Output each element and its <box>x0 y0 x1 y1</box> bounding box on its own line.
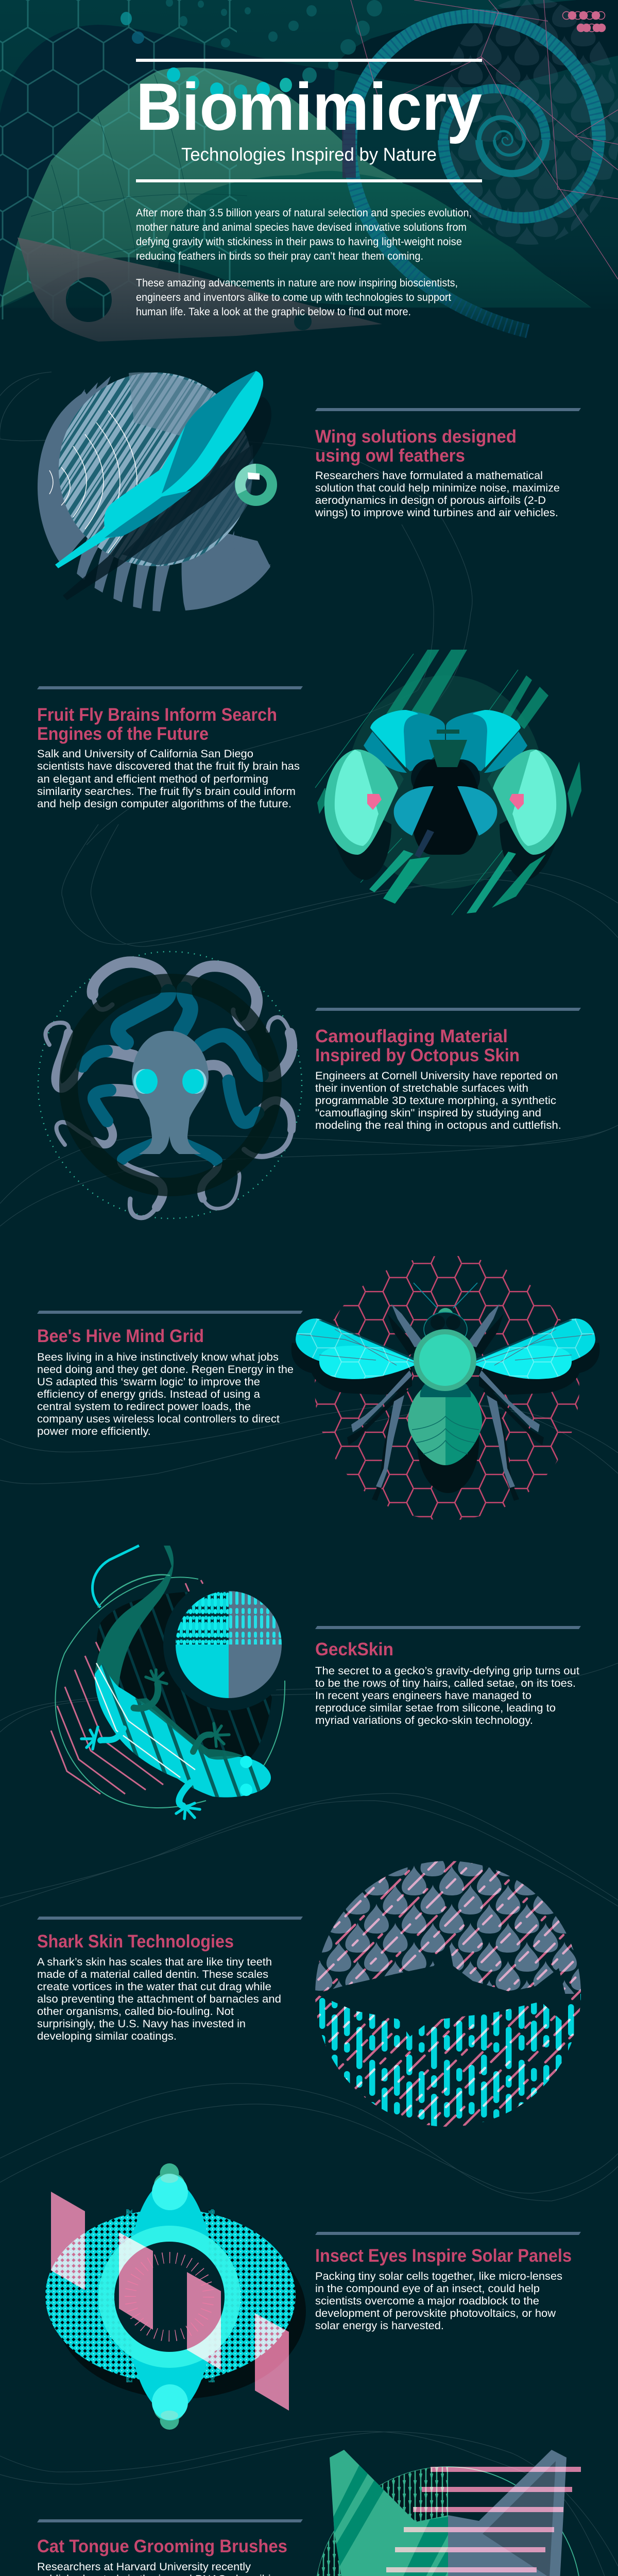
illustration: insect eye <box>45 2163 306 2430</box>
section: insect eyes <box>315 2232 581 2332</box>
illustration: gecko <box>51 1546 294 1819</box>
body text: surprisingly, the U.S. Navy has invested in <box>37 2018 246 2030</box>
body text: need doing and they get done. Regen Energy in the <box>37 1364 294 1376</box>
bee left half <box>291 1304 426 1501</box>
body text: an elegant and efficient method of performing <box>37 773 268 785</box>
head and body <box>132 1031 209 1154</box>
icon: pink circle dots top right <box>562 11 606 32</box>
body text: A shark’s skin has scales that are like tiny teeth <box>37 1956 272 1968</box>
body text <box>37 1351 294 1437</box>
body text <box>315 1070 561 1131</box>
abdomen <box>408 1380 482 1465</box>
body text: wings) to improve wind turbines and air vehicles. <box>315 507 558 519</box>
body text: modeling the real thing in octopus and cuttlefish. <box>315 1120 561 1131</box>
illustration: octopus <box>38 952 302 1218</box>
abdomen shadow <box>417 1392 479 1493</box>
ear inner <box>483 2461 556 2576</box>
illustration: shark skin <box>314 1860 582 2128</box>
rule <box>37 1917 303 1920</box>
ring <box>106 2234 233 2360</box>
rule <box>315 1008 581 1011</box>
dark ring <box>68 983 272 1187</box>
title block <box>136 59 482 182</box>
left arrow pattern <box>315 2467 448 2576</box>
body text: solution that could help minimize noise, maximize <box>315 482 560 494</box>
left eye <box>133 1069 158 1094</box>
dotted circle <box>38 952 302 1218</box>
body text: made of a material called dentin. These scales <box>37 1969 268 1980</box>
rule <box>37 1311 303 1314</box>
body text: Packing tiny solar cells together, like micro-lenses <box>315 2270 562 2282</box>
pink dashes <box>314 1860 582 2128</box>
thin lines <box>315 654 520 915</box>
body text: development of perovskite photovoltaics, or how <box>315 2308 556 2319</box>
body text <box>315 2270 562 2332</box>
heading: Wing solutions designed <box>315 427 517 447</box>
heading: Cat Tongue Grooming Brushes <box>37 2536 287 2556</box>
green ring <box>240 469 272 501</box>
body text: create vortices in the water that cut drag while <box>37 1981 271 1993</box>
left cyan paw <box>81 1727 124 1749</box>
intro text: These amazing advancements in nature are now inspiring bioscientists, <box>136 277 458 289</box>
back strip in green <box>135 1698 243 1759</box>
half: left (mirrored) <box>324 710 448 880</box>
scales <box>314 1860 582 1994</box>
illustration: fruit fly brain <box>315 650 581 915</box>
body text: company uses wireless local controllers to direct <box>37 1413 280 1425</box>
body text: reproduce similar setae from silicone, leading to <box>315 1702 556 1714</box>
body text: efficiency of energy grids. Instead of using a <box>37 1388 260 1400</box>
top stripes <box>317 650 581 818</box>
face left stripes <box>330 2463 448 2576</box>
thin circle <box>315 2467 581 2576</box>
shadow <box>56 2224 306 2399</box>
body text: myriad variations of gecko-skin technology. <box>315 1715 533 1726</box>
patterned disk <box>176 1591 282 1698</box>
section: geckskin <box>315 1626 581 1726</box>
lower shaded area <box>122 445 253 565</box>
owl wing fringe <box>68 376 271 572</box>
lower teal lobes <box>394 786 497 836</box>
vertical cyan lens <box>126 2180 215 2413</box>
pink lines <box>51 1580 203 1794</box>
side dotted overlap <box>126 2209 215 2382</box>
tongue bars <box>315 2467 581 2576</box>
title block: Biomimicry <box>136 69 482 144</box>
lower stripes <box>369 829 546 913</box>
rule <box>315 2232 581 2235</box>
intro text: After more than 3.5 billion years of natural selection and species evolution, <box>136 207 472 219</box>
body text <box>37 1956 281 2042</box>
face left <box>330 2450 448 2576</box>
radial ticks <box>130 2258 209 2336</box>
body text: aerodynamics in design of porous airfoils (2-D <box>315 495 546 506</box>
body text: developing similar coatings. <box>37 2030 177 2042</box>
disc stripes <box>59 372 252 566</box>
dotted eye disc <box>45 2209 296 2382</box>
shark silhouette <box>315 1944 565 2037</box>
body text: Salk and University of California San Diego <box>37 748 253 760</box>
section: octopus <box>315 1008 581 1131</box>
title block: Technologies Inspired by Nature <box>181 144 437 165</box>
body text: programmable 3D texture morphing, a synthetic <box>315 1095 556 1107</box>
body text: US adapted this ‘swarm logic’ to improve the <box>37 1376 260 1388</box>
tentacles <box>45 962 292 1218</box>
body text: The secret to a gecko’s gravity-defying grip turns out <box>315 1665 579 1677</box>
illustration: owl feather <box>38 371 272 616</box>
body text: other organisms, called bio-fouling. Not <box>37 2006 234 2018</box>
thin green circle <box>55 1577 206 1808</box>
heading: GeckSkin <box>315 1639 393 1659</box>
gecko stripes <box>101 1663 261 1797</box>
illustration: cat <box>317 2450 581 2576</box>
section: bee <box>37 1311 303 1437</box>
heading: Bee's Hive Mind Grid <box>37 1326 204 1346</box>
honeycomb <box>315 1256 579 1520</box>
feather <box>55 371 263 568</box>
halo <box>348 675 543 889</box>
gap ring around disk <box>163 1579 294 1710</box>
face right <box>448 2450 566 2576</box>
intro text <box>136 207 472 318</box>
heading: Fruit Fly Brains Inform Search <box>37 705 277 725</box>
intro text: mother nature and animal species have devised innovative solutions from <box>136 222 467 233</box>
inner lighter disc <box>59 372 252 566</box>
body text: scientists have discovered that the fruit fly brain has <box>37 760 300 772</box>
body text: in the compound eye of an insect, could help <box>315 2283 540 2295</box>
intro text: reducing feathers in birds so their pray can’t hear them coming. <box>136 250 423 262</box>
tail <box>95 1546 174 1687</box>
body text: also preventing the attachment of barnacles and <box>37 1993 281 2005</box>
owl wing outer <box>38 392 270 612</box>
body text: Researchers at Harvard University recently <box>37 2561 251 2573</box>
body text: Engineers at Cornell University have reported on <box>315 1070 558 1082</box>
abdomen band <box>420 1384 471 1397</box>
cyan bars <box>314 1994 582 2128</box>
disc upper tone <box>129 372 242 443</box>
body text <box>315 470 560 519</box>
body text: scientists overcome a major roadblock to the <box>315 2295 539 2307</box>
cap overlap <box>161 2174 178 2420</box>
head <box>424 1308 467 1346</box>
right eye <box>182 1069 207 1094</box>
heading: Shark Skin Technologies <box>37 1931 234 1952</box>
upper dark paw <box>134 1670 167 1708</box>
section: cat <box>37 2519 303 2576</box>
bee right half <box>465 1304 599 1501</box>
pupil <box>114 2242 225 2352</box>
heading line two: using owl feathers <box>315 446 465 466</box>
intro text: engineers and inventors alike to come up with technologies to support <box>136 292 451 303</box>
body text: In recent years engineers have managed to <box>315 1690 531 1702</box>
body text: "camouflaging skin" inspired by studying and <box>315 1107 541 1119</box>
body text: to be the rows of tiny hairs, called setae, on its toes. <box>315 1677 576 1689</box>
body text: power more efficiently. <box>37 1426 151 1437</box>
body text: solar energy is harvested. <box>315 2320 444 2332</box>
intro text: human life. Take a look at the graphic below to find out more. <box>136 306 411 318</box>
body text: Bees living in a hive instinctively know what jobs <box>37 1351 279 1363</box>
rule <box>315 1626 581 1629</box>
feather shadow <box>63 397 271 600</box>
intro text: defying gravity with stickiness in their paws to having light-weight noise <box>136 236 462 248</box>
tail tip <box>93 1546 139 1607</box>
body text: central system to redirect power loads, the <box>37 1401 251 1413</box>
body text <box>315 1665 579 1726</box>
body text <box>37 2561 301 2576</box>
rule <box>315 408 581 411</box>
body text: and help design computer algorithms of the future. <box>37 798 291 810</box>
section: shark <box>37 1917 303 2042</box>
bottom cyan paw <box>176 1783 200 1819</box>
heading line two: Inspired by Octopus Skin <box>315 1045 520 1065</box>
gecko body <box>95 1663 271 1798</box>
thorax <box>414 1329 476 1391</box>
section: wing solutions <box>315 408 581 519</box>
half: right <box>443 710 566 880</box>
body text: Researchers have formulated a mathematical <box>315 470 543 482</box>
feather notches <box>62 524 185 616</box>
parallelograms <box>51 2192 289 2411</box>
heading: Insect Eyes Inspire Solar Panels <box>315 2246 572 2266</box>
body text <box>37 748 300 810</box>
rule <box>37 686 303 689</box>
honeycomb through wings <box>297 1318 594 1379</box>
centre column <box>411 757 480 855</box>
antennae <box>414 1283 477 1308</box>
lens highlights <box>152 2174 188 2420</box>
heading: Camouflaging Material <box>315 1026 508 1046</box>
upper centre marks <box>429 730 467 767</box>
rule <box>37 2519 303 2522</box>
body text: their invention of stretchable surfaces with <box>315 1082 528 1094</box>
paws <box>81 1670 229 1819</box>
green end caps <box>154 2163 185 2430</box>
illustration: bee <box>291 1256 599 1520</box>
white lines <box>95 1663 195 1777</box>
feather dark vane <box>162 371 256 494</box>
dark blob <box>97 1592 272 1758</box>
section: fruit fly <box>37 686 303 810</box>
right thin arc <box>255 1681 285 1777</box>
right dark paw <box>193 1723 229 1752</box>
eye bumps <box>240 1756 252 1796</box>
body text: similarity searches. The fruit fly's brain could inform <box>37 786 296 798</box>
feather lower vane <box>105 490 191 538</box>
header background artwork <box>0 0 618 342</box>
heading line two: Engines of the Future <box>37 724 209 744</box>
second green arc <box>98 1575 170 1607</box>
sound wave arcs <box>49 411 137 553</box>
